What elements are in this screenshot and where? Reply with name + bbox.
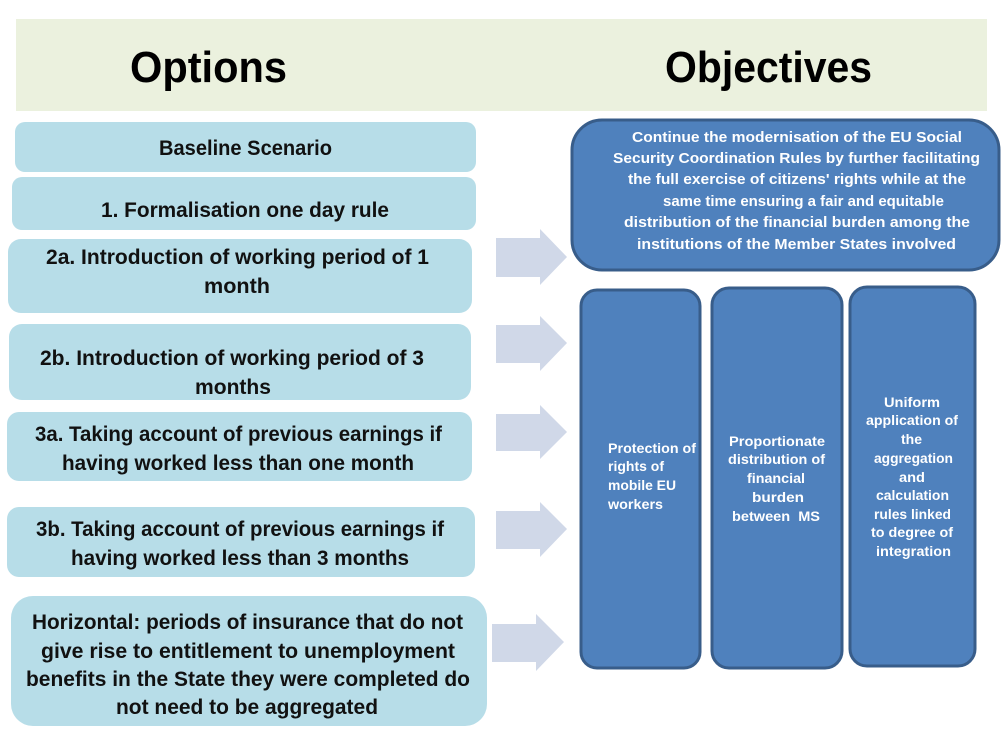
objective: uniform application: the <box>901 432 923 447</box>
objective: main objective panel: Security Coordination Rules by further facilitating <box>613 151 980 167</box>
option: baseline scenario: Baseline Scenario <box>159 137 332 160</box>
option: 2a working period of 1 month: month <box>204 275 270 298</box>
objective: main objective panel: Continue the modernisation of the EU Social <box>632 130 962 146</box>
option: horizontal: Horizontal: periods of insurance that do not <box>32 611 463 634</box>
objective: proportionate distribution <box>712 288 842 668</box>
heading: Options: Options <box>130 43 287 92</box>
option: 2b working period of 3 months <box>9 324 471 400</box>
option: horizontal: give rise to entitlement to unemployment <box>41 640 455 663</box>
objective: uniform application: and <box>899 470 925 485</box>
option: 3b previous earnings 3 months: having worked less than 3 months <box>71 547 409 570</box>
option: 3b previous earnings 3 months: 3b. Taking account of previous earnings if <box>36 518 445 541</box>
objective: main objective panel <box>572 120 999 270</box>
objective: protection of rights <box>581 290 700 668</box>
option: 2a working period of 1 month: 2a. Introduction of working period of 1 <box>46 246 429 269</box>
objective: proportionate distribution: between MS <box>732 509 820 524</box>
objective: uniform application: integration <box>876 544 951 559</box>
heading: Objectives: Objectives <box>665 43 872 92</box>
objective: uniform application: to degree of <box>871 525 954 540</box>
option: horizontal: benefits in the State they were completed do <box>26 668 470 691</box>
arrow 4 <box>496 502 567 557</box>
option: 3a previous earnings one month <box>7 412 472 481</box>
option: 1 formalisation one day rule <box>12 177 476 230</box>
option: 2a working period of 1 month <box>8 239 472 313</box>
option: horizontal <box>11 596 487 726</box>
option: 1 formalisation one day rule: 1. Formalisation one day rule <box>101 199 389 222</box>
objective: main objective panel: distribution of the financial burden among the <box>624 215 970 231</box>
objective: main objective panel: institutions of the Member States involved <box>637 237 956 253</box>
arrow 1 <box>496 229 567 285</box>
arrow 3 <box>496 405 567 459</box>
option: baseline scenario <box>15 122 476 172</box>
objective: main objective panel: same time ensuring a fair and equitable <box>663 194 944 210</box>
arrow 5 <box>492 614 564 671</box>
objective: uniform application: Uniform <box>884 395 940 410</box>
option: 3b previous earnings 3 months <box>7 507 475 577</box>
objective: uniform application: application of <box>866 413 959 428</box>
option: 3a previous earnings one month: 3a. Taking account of previous earnings if <box>35 423 443 446</box>
objective: protection of rights: mobile EU <box>608 478 676 493</box>
objective: proportionate distribution: Proportionate <box>729 434 826 449</box>
objective: proportionate distribution: burden <box>752 490 804 505</box>
objective: protection of rights: rights of <box>608 459 665 474</box>
objective: uniform application: rules linked <box>874 507 951 522</box>
objective: proportionate distribution: distribution of <box>728 452 826 467</box>
objective: uniform application: calculation <box>876 488 949 503</box>
arrow 2 <box>496 316 567 371</box>
option: 3a previous earnings one month: having worked less than one month <box>62 452 414 475</box>
objective: uniform application: aggregation <box>874 451 953 466</box>
option: 2b working period of 3 months: months <box>195 376 271 399</box>
objective: main objective panel: the full exercise of citizens' rights while at the <box>628 172 966 188</box>
objective: protection of rights: workers <box>607 497 663 512</box>
option: 2b working period of 3 months: 2b. Introduction of working period of 3 <box>40 347 424 370</box>
objective: proportionate distribution: financial <box>747 471 805 486</box>
objective: protection of rights: Protection of <box>608 441 697 456</box>
objective: uniform application <box>850 287 975 666</box>
header band <box>16 19 987 111</box>
option: horizontal: not need to be aggregated <box>116 696 378 719</box>
